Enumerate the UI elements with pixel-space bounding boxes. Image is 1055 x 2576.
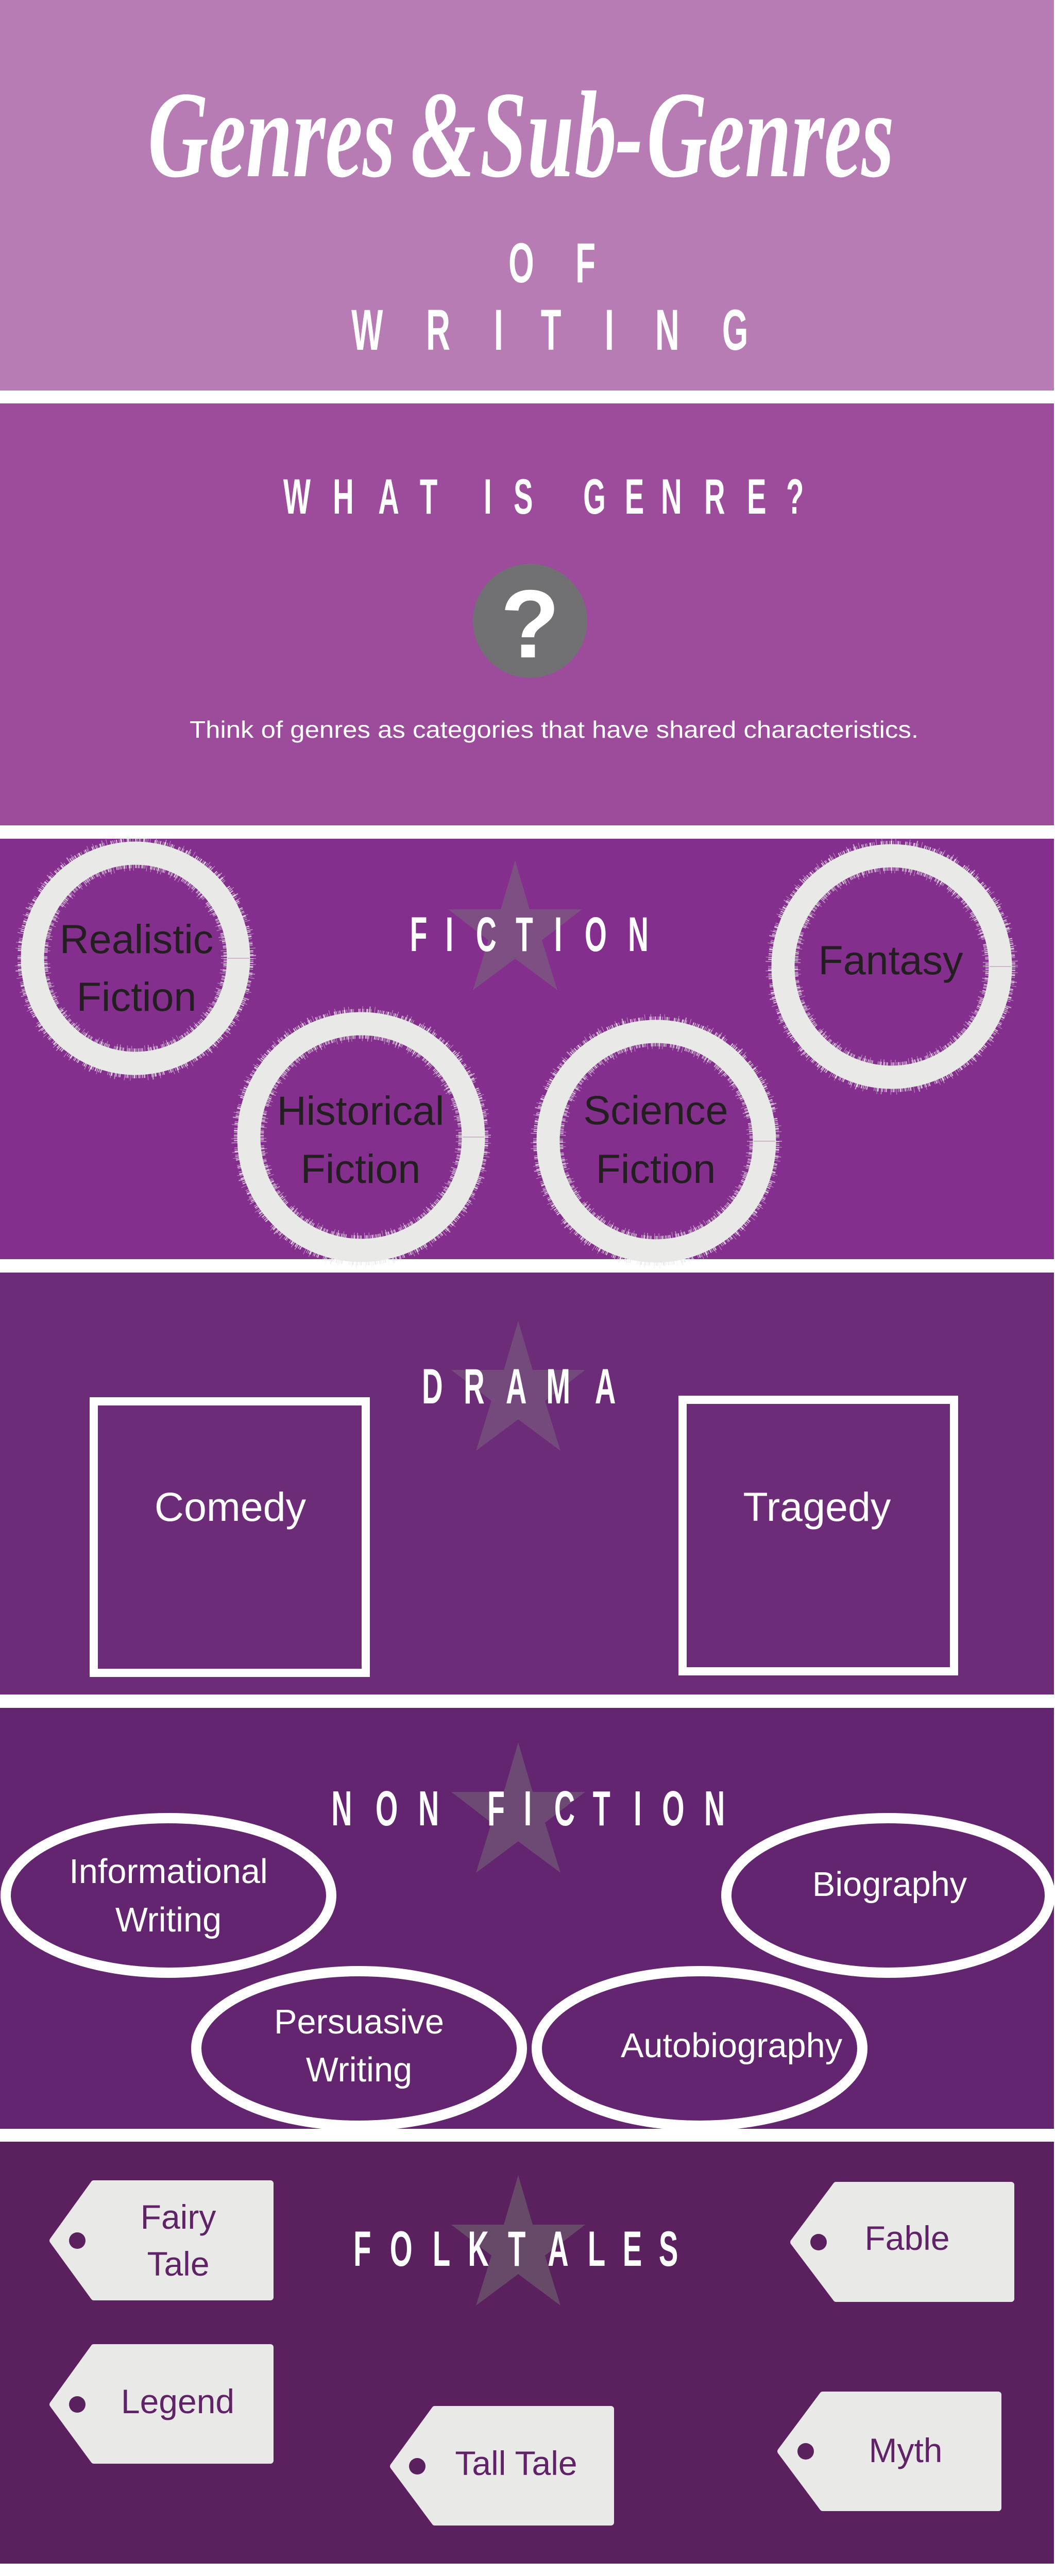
subtitle: writing: WRITING (351, 298, 748, 362)
title: & (411, 66, 476, 204)
oval: persuasive writing: Persuasive (274, 2003, 444, 2041)
tag: fable: Fable (864, 2219, 950, 2257)
tag: myth (780, 2395, 998, 2508)
title: Genres (646, 66, 894, 204)
heading: folktales: FOLKTALES (353, 2221, 678, 2277)
tag: myth: Myth (869, 2431, 943, 2469)
box: comedy: Comedy (155, 1484, 307, 1530)
box: tragedy: Tragedy (743, 1484, 891, 1530)
icon: question mark (473, 564, 587, 678)
tag: fairy tale: Tale (147, 2245, 210, 2283)
panel: non fiction (0, 1708, 1054, 2129)
panel: fiction (0, 839, 1054, 1259)
ring: historical fiction: Historical (277, 1088, 444, 1133)
icon: star (448, 860, 582, 990)
oval: autobiography (537, 1971, 862, 2126)
oval: biography (726, 1818, 1050, 1973)
oval: biography: Biography (812, 1866, 967, 1904)
tag: legend: Legend (121, 2382, 234, 2420)
subtitle: of: OF (508, 232, 595, 295)
tag: tall tale: Tall Tale (455, 2444, 577, 2482)
tag: fairy tale (53, 2183, 270, 2297)
ring: historical fiction: Fiction (301, 1146, 420, 1192)
tag: fairy tale: Fairy (141, 2198, 216, 2236)
icon: star (451, 1742, 585, 1873)
heading: what is genre: WHATISGENRE? (283, 468, 804, 524)
ring: fantasy (783, 856, 1011, 1077)
ring: realistic fiction: Realistic (60, 916, 213, 962)
ring: realistic fiction (32, 853, 249, 1063)
panel: what is genre (0, 403, 1054, 825)
text: genre definition: Think of genres as categories that have shared characteristics. (190, 716, 918, 743)
icon: question mark: ? (501, 570, 559, 678)
oval: informational writing: Writing (115, 1901, 222, 1939)
box: comedy (94, 1401, 366, 1673)
title: Genres (148, 66, 395, 204)
oval: persuasive writing: Writing (306, 2051, 412, 2089)
heading: drama: DRAMA (422, 1358, 616, 1414)
panel: folktales (0, 2142, 1054, 2564)
oval: informational writing: Informational (69, 1853, 268, 1891)
oval: autobiography: Autobiography (621, 2027, 843, 2065)
tag: legend (53, 2347, 270, 2461)
ring: science fiction (548, 1031, 775, 1251)
heading: non fiction: NONFICTION (331, 1781, 725, 1836)
heading: fiction: FICTION (410, 908, 649, 962)
icon: star (451, 1321, 585, 1451)
oval: persuasive writing (196, 1971, 522, 2126)
panel: drama (0, 1273, 1054, 1694)
icon: star (451, 2175, 585, 2306)
ring: science fiction: Science (583, 1087, 728, 1133)
panel: title header (0, 0, 1054, 391)
box: tragedy (683, 1400, 954, 1671)
oval: informational writing (6, 1818, 331, 1973)
ring: science fiction: Fiction (596, 1146, 716, 1192)
title: Sub- (480, 66, 643, 204)
tag: fable (793, 2185, 1011, 2299)
ring: historical fiction (249, 1024, 484, 1250)
tag: tall tale (393, 2409, 611, 2522)
ring: fantasy: Fantasy (818, 937, 963, 983)
ring: realistic fiction: Fiction (77, 974, 196, 1020)
